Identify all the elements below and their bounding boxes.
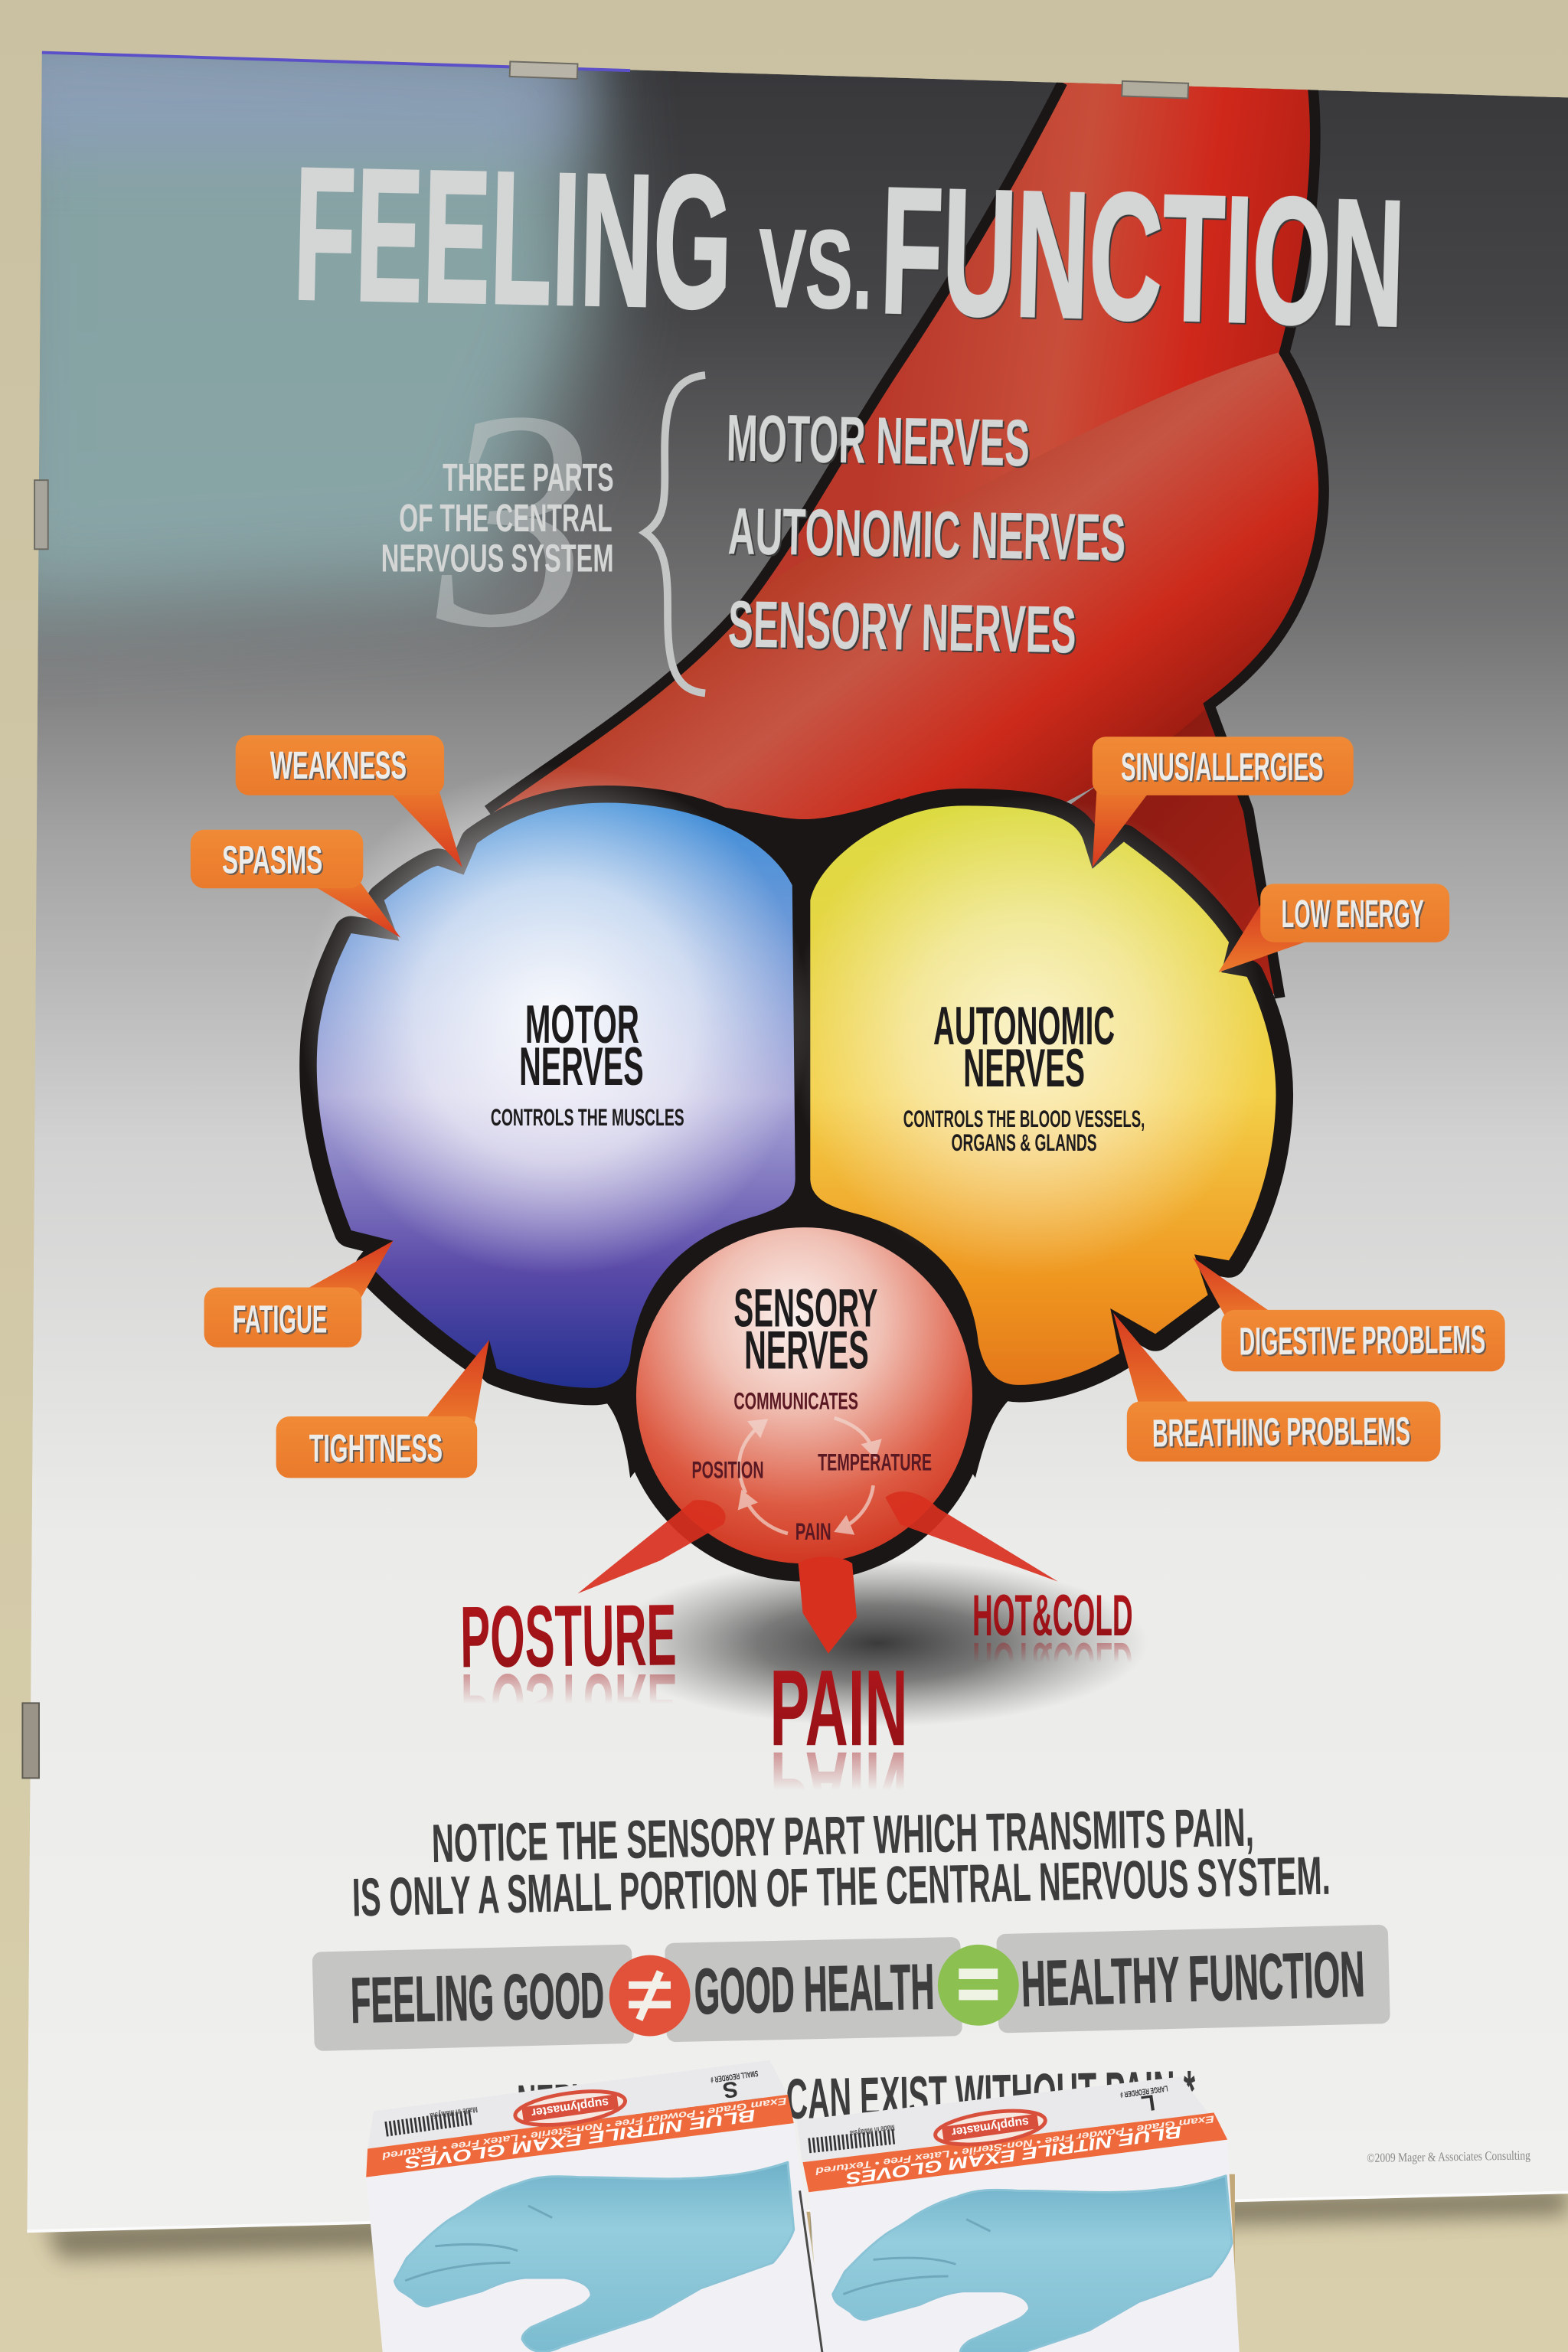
- panel: sensory nerves: [636, 1227, 972, 1563]
- barcode: [808, 2137, 894, 2146]
- list of nerve types: [726, 402, 1126, 668]
- blue blob highlight: [300, 766, 810, 1276]
- bundle right outline: [1210, 87, 1324, 998]
- panel: motor nerves: [300, 766, 810, 1388]
- blue blob: [317, 802, 795, 1388]
- main band text: BLUE NITRILE EXAM GLOVES: [403, 2106, 756, 2173]
- footnote partly hidden: NERVE PROBLEMS: [517, 2068, 767, 2137]
- arrow: hot and cold: [885, 1491, 1058, 1582]
- gap between the boxes: [800, 2190, 822, 2352]
- poster: HOT&COLD: [972, 1583, 1133, 1648]
- equation row: [312, 1925, 1390, 2051]
- callout: low energy: LOW ENERGY: [1282, 892, 1424, 936]
- callout: spasms: SPASMS: [222, 838, 322, 882]
- box top flap: [368, 2060, 788, 2148]
- label: posture: POSTURE: [460, 1586, 677, 1686]
- icon: blue glove: [394, 2162, 794, 2352]
- callout: sinus and allergies: SINUS/ALLERGIES: [1121, 745, 1324, 789]
- seal logo: [513, 2086, 627, 2131]
- curly brace: [645, 375, 705, 693]
- main band text: BLUE NITRILE EXAM GLOVES: [844, 2122, 1183, 2189]
- tan strip between boxes: [789, 2212, 810, 2265]
- callout: tightness: [276, 1340, 489, 1478]
- orange band: [802, 2112, 1227, 2192]
- box: feeling good: [312, 1945, 634, 2051]
- title: [292, 128, 1407, 364]
- callout: tightness: TIGHTNESS: [309, 1426, 443, 1470]
- made in text: Made in Malaysia: [429, 2105, 478, 2120]
- lower main strand: [488, 83, 1324, 840]
- arrow: posture: [578, 1500, 726, 1593]
- list of nerve types: MOTOR NERVES: [726, 402, 1031, 481]
- label: pain: PAIN: [769, 1730, 908, 1851]
- autonomic description: CONTROLS THE BLOOD VESSELS,: [903, 1106, 1145, 1132]
- three parts caption: [381, 456, 614, 580]
- box: feeling good: FEELING GOOD: [350, 1959, 605, 2037]
- motor heading: MOTOR: [525, 994, 639, 1054]
- frame clip: top left: [510, 61, 577, 79]
- list of nerve types: AUTONOMIC NERVES: [727, 495, 1126, 575]
- yellow blob: [810, 805, 1276, 1385]
- motor description: CONTROLS THE MUSCLES: [491, 1104, 684, 1131]
- size letter and reorder code: [1119, 2083, 1168, 2116]
- callout: breathing problems: [1113, 1313, 1440, 1462]
- box: good health: GOOD HEALTH: [694, 1951, 935, 2027]
- callout: weakness: WEAKNESS: [270, 743, 407, 787]
- glare on upper left of poster: [0, 0, 593, 616]
- label: posture: POSTURE: [461, 1655, 677, 1753]
- bundle left outline: [488, 83, 1063, 810]
- panel: autonomic nerves: [788, 795, 1276, 1385]
- glove box right: [797, 2076, 1240, 2352]
- copyright: ©2009 Mager & Associates Consulting: [1367, 2148, 1530, 2165]
- three parts caption: THREE PARTS: [443, 456, 614, 499]
- title word: VS.: VS.: [757, 206, 874, 332]
- callout: fatigue: [204, 1241, 393, 1348]
- upper strand: [705, 60, 1335, 616]
- box: healthy function: [996, 1925, 1390, 2034]
- label: posture: [460, 1586, 677, 1753]
- panel: sensory nerves: POSITION: [691, 1456, 764, 1483]
- box front: [366, 2123, 827, 2352]
- arrow: pain: [799, 1557, 857, 1654]
- poster: HOT&COLD: [972, 1630, 1133, 1695]
- footnote partly hidden: CAN EXIST WITHOUT PAIN *: [786, 2059, 1196, 2131]
- list of nerve types: SENSORY NERVES: [727, 588, 1076, 668]
- callout: weakness: [236, 735, 462, 867]
- sensory labels: COMMUNICATES: [733, 1387, 858, 1414]
- size letter and reorder code: [710, 2069, 759, 2103]
- panel: autonomic nerves: NERVES: [963, 1037, 1085, 1098]
- panel: sensory nerves: NERVES: [744, 1319, 869, 1380]
- small band text: Exam Grade • Powder Free • Non-Sterile • Latex Free • Textured: [815, 2113, 1215, 2177]
- lower dark strand: [1021, 705, 1280, 998]
- sensory heading: SENSORY: [733, 1277, 877, 1338]
- size letter and reorder code: LARGE REORDER #: [1119, 2083, 1168, 2099]
- red twisted nerve bundle: [488, 60, 1335, 998]
- seal logo: supplymaster: [531, 2096, 609, 2119]
- yellow blob highlight: [788, 795, 1268, 1276]
- panel: motor nerves: NERVES: [519, 1036, 644, 1096]
- frame clip: top right: [1122, 81, 1188, 98]
- size letter and reorder code: SMALL REORDER #: [710, 2069, 759, 2084]
- callout: low energy: [1218, 884, 1449, 972]
- box: good health: [665, 1937, 962, 2042]
- frame clip: left lower: [22, 1703, 39, 1778]
- label: pain: [769, 1647, 908, 1851]
- box top flap: [797, 2076, 1221, 2167]
- black outline of the nerve diagram: [317, 799, 1276, 1582]
- poster drop shadow: [45, 2187, 1568, 2259]
- title word: FEELING: FEELING: [292, 128, 734, 348]
- panel: autonomic nerves: ORGANS & GLANDS: [952, 1129, 1097, 1156]
- made in text: Made in Malaysia: [849, 2122, 895, 2138]
- icon: blue glove: [833, 2176, 1232, 2352]
- label: pain: PAIN: [769, 1647, 908, 1768]
- ground shadow under sensory circle: [608, 1559, 1148, 1727]
- size letter and reorder code: S: [721, 2076, 740, 2103]
- glove box left: [366, 2060, 827, 2352]
- panel: sensory nerves: PAIN: [795, 1518, 831, 1545]
- panel: sensory nerves: TEMPERATURE: [818, 1449, 932, 1476]
- icon: equal: [938, 1945, 1019, 2026]
- box front: [808, 2140, 1240, 2352]
- three parts caption: OF THE CENTRAL: [399, 496, 612, 540]
- frame clip: left upper: [34, 480, 48, 549]
- big numeral three: 3: [432, 347, 593, 692]
- sensory circle: [636, 1227, 972, 1563]
- callout: spasms: [191, 830, 400, 938]
- poster bottom edge highlight: [27, 2192, 1568, 2231]
- orange band: [366, 2095, 794, 2177]
- circular arrows: [739, 1418, 875, 1534]
- seal logo: supplymaster: [951, 2115, 1030, 2138]
- tan strips behind boxes: [1220, 2174, 1235, 2276]
- purple top edge of poster: [42, 53, 630, 70]
- callout: digestive problems: [1193, 1257, 1505, 1371]
- size letter and reorder code: L: [1139, 2089, 1157, 2116]
- callout: fatigue: FATIGUE: [233, 1297, 327, 1341]
- icon: not equal: [609, 1955, 691, 2036]
- three parts caption: NERVOUS SYSTEM: [381, 537, 614, 580]
- notice text: [351, 1797, 1331, 1928]
- label: hot and cold: [972, 1583, 1133, 1695]
- autonomic heading: AUTONOMIC: [933, 995, 1115, 1056]
- barcode: [386, 2117, 472, 2129]
- callout: sinus and allergies: [1093, 737, 1354, 867]
- small band text: Exam Grade • Powder Free • Non-Sterile • Latex Free • Textured: [381, 2096, 788, 2162]
- blue glare streak: [0, 15, 593, 158]
- seal logo: [933, 2105, 1047, 2151]
